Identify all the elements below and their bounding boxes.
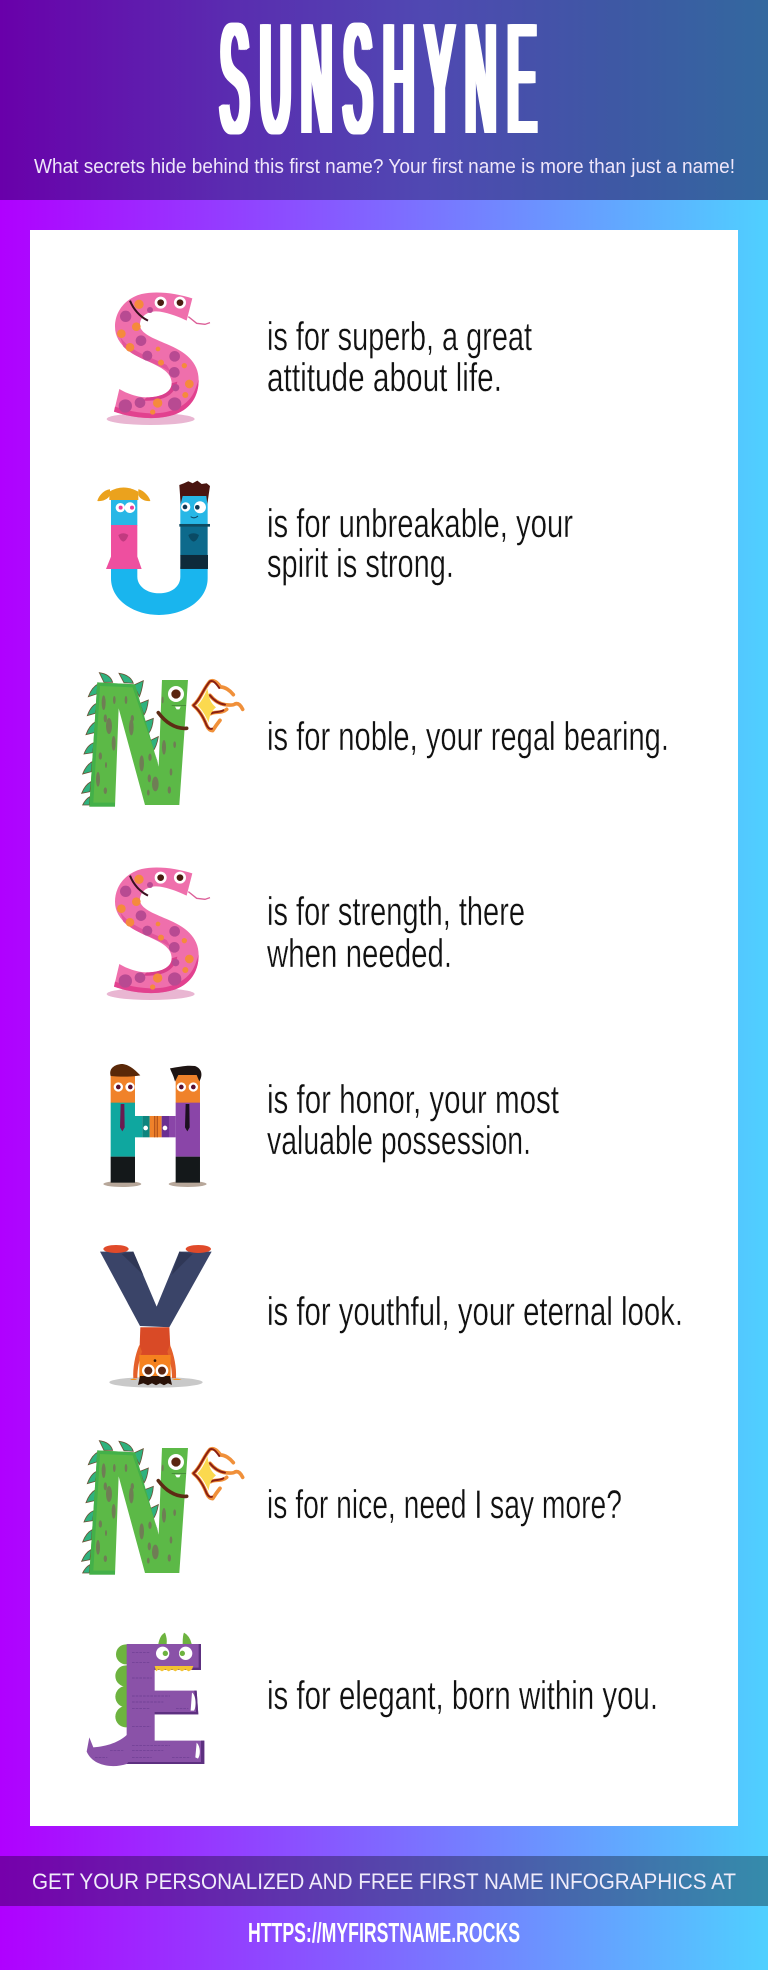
text: S line: when needed.	[266, 932, 452, 976]
icon: green dragon N	[82, 673, 243, 807]
icon: pink snake S	[107, 868, 210, 1000]
text: H line: valuable possession.	[267, 1119, 531, 1163]
text: S line: is for superb, a great	[267, 315, 532, 359]
row: letter E elegant	[87, 1633, 658, 1766]
text: U line	[267, 502, 573, 586]
text: H line: is for honor, your most	[267, 1078, 559, 1122]
text: H line	[267, 1078, 559, 1163]
text: S line: attitude about life.	[267, 356, 502, 400]
text: U line: is for unbreakable, your	[267, 502, 573, 546]
text: N line: is for nice, need I say more?	[267, 1483, 622, 1527]
footer call to action: GET YOUR PERSONALIZED AND FREE FIRST NAME INFOGRAPHICS AT	[32, 1869, 736, 1894]
row: letter H honor	[103, 1064, 559, 1187]
icon: purple monster E	[87, 1633, 204, 1766]
text: S line	[267, 315, 532, 400]
subtitle: What secrets hide behind this first name? Your first name is more than just a name!	[34, 156, 735, 178]
icon: two businessmen H	[103, 1064, 207, 1187]
row: letter N nice	[82, 1441, 622, 1575]
icon: handstand person Y	[100, 1245, 212, 1388]
text: S line: is for strength, there	[267, 890, 525, 934]
icon: flame	[193, 1449, 243, 1499]
text: U line: spirit is strong.	[267, 542, 454, 586]
title	[218, 0, 538, 167]
icon: pink snake S	[107, 293, 210, 425]
text: S line	[266, 890, 525, 976]
footer URL: HTTPS://MYFIRSTNAME.ROCKS	[248, 1917, 520, 1948]
white card panel	[30, 230, 738, 1826]
icon: two-person U	[97, 481, 210, 615]
header band	[0, 0, 768, 200]
row: letter N noble	[82, 673, 669, 807]
row: letter S superb	[107, 293, 532, 425]
icon: flame	[193, 681, 243, 731]
icon: green dragon N	[82, 1441, 243, 1575]
row: letter U unbreakable	[97, 481, 573, 615]
row: letter S strength	[107, 868, 525, 1000]
row: letter Y youthful	[100, 1245, 683, 1388]
footer band	[0, 1856, 768, 1906]
